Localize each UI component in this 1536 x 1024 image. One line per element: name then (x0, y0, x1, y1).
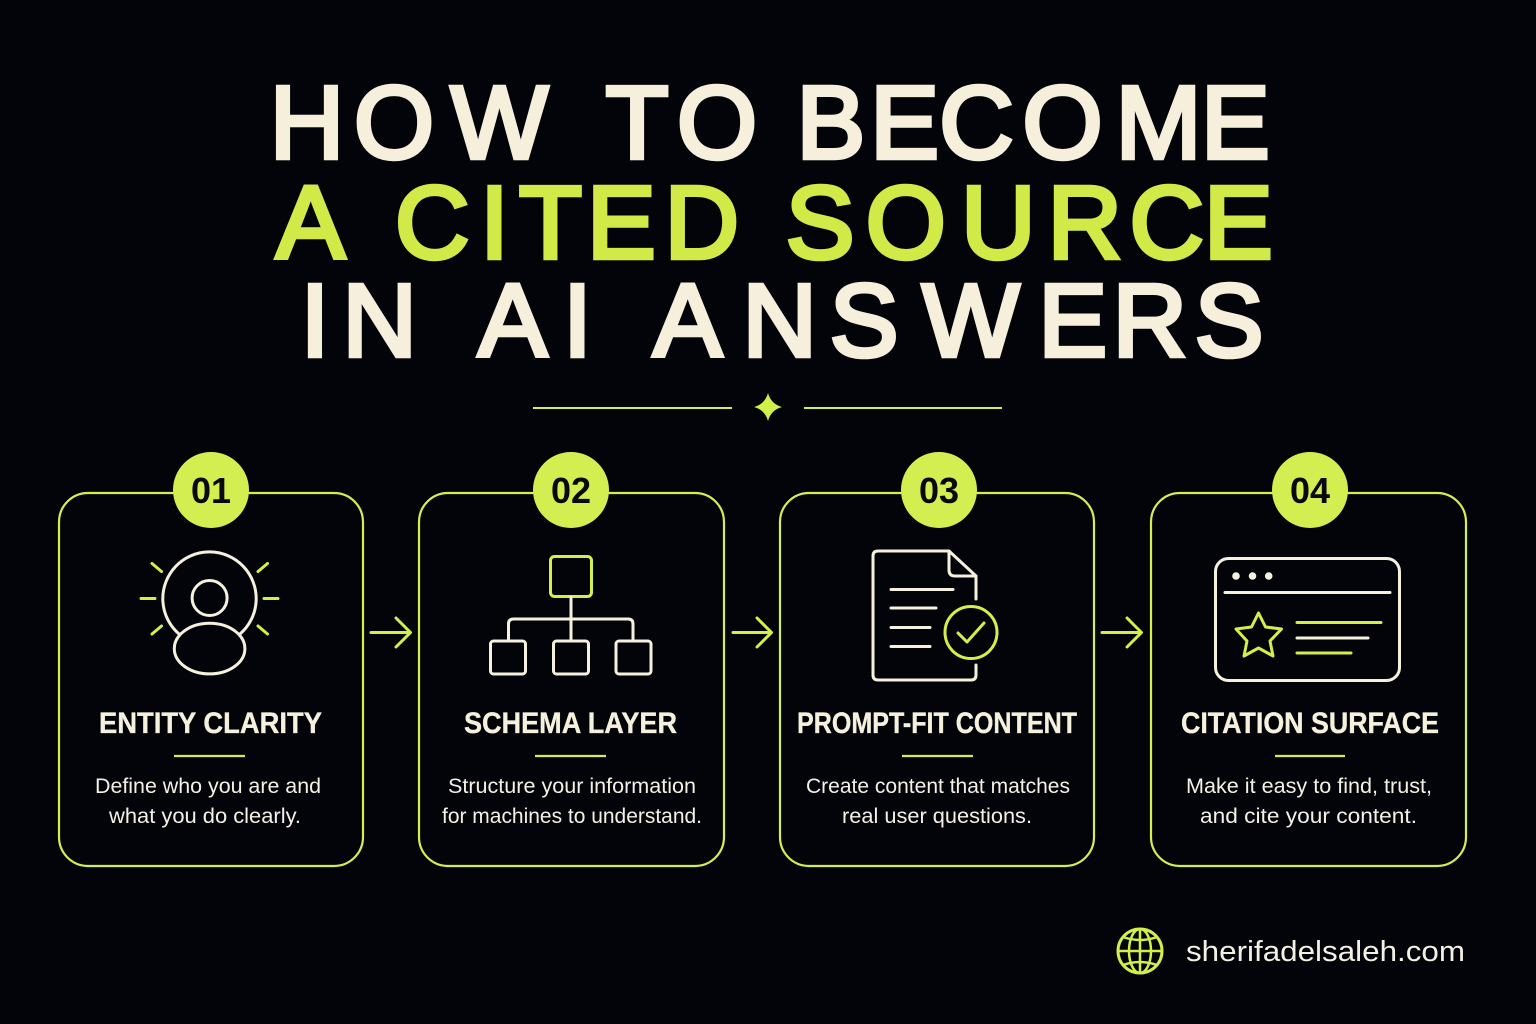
number badge 02: 02 (551, 470, 591, 511)
number badge 01: 01 (191, 470, 231, 511)
card border (59, 493, 363, 866)
number badge 03 (901, 452, 977, 528)
title line 3: IN AI ANSWERS (301, 263, 1263, 378)
step 2 heading: SCHEMA LAYER (464, 707, 677, 740)
icon: document with check (873, 551, 997, 680)
step 2 description: Structure your information (448, 775, 696, 798)
panel: step 4 citation surface (1151, 452, 1466, 866)
step 4 heading: CITATION SURFACE (1181, 707, 1439, 740)
card border (780, 493, 1094, 866)
step 1 description: what you do clearly. (108, 805, 301, 828)
step 4 description: and cite your content. (1200, 805, 1417, 828)
panel: step 3 prompt-fit content (780, 452, 1094, 866)
card border (1151, 493, 1466, 866)
step 3 heading: PROMPT-FIT CONTENT (797, 707, 1077, 740)
icon: browser window with star (1216, 558, 1400, 680)
arrow 3 to 4 (1102, 618, 1142, 647)
step 4 description (1186, 775, 1432, 828)
title (270, 65, 1273, 378)
step 3 description (806, 775, 1070, 828)
number badge 04: 04 (1290, 470, 1330, 511)
step 2 description (442, 775, 702, 828)
title divider with sparkle (533, 393, 1002, 421)
panel: step 1 entity clarity (59, 452, 363, 866)
number badge 02 (533, 452, 609, 528)
number badge 03: 03 (919, 470, 959, 511)
number badge 04 (1272, 452, 1348, 528)
arrow 1 to 2 (371, 618, 410, 647)
step 1 heading: ENTITY CLARITY (99, 707, 322, 740)
step 2 description: for machines to understand. (442, 805, 702, 828)
icon: person with rays (141, 552, 278, 674)
step 3 description: real user questions. (842, 805, 1032, 828)
arrow 2 to 3 (733, 618, 772, 647)
step 4 description: Make it easy to find, trust, (1186, 775, 1432, 798)
title line 1: HOW TO BECOME (270, 65, 1270, 180)
step 1 description: Define who you are and (95, 775, 321, 798)
step 1 description (95, 775, 321, 828)
panel: step 2 schema layer (419, 452, 724, 866)
website address: sherifadelsaleh.com (1186, 936, 1465, 968)
icon: globe (1118, 929, 1162, 973)
number badge 01 (173, 452, 249, 528)
step 3 description: Create content that matches (806, 775, 1070, 798)
website footer (1118, 929, 1465, 973)
title line 2: A CITED SOURCE (276, 165, 1273, 280)
card border (419, 493, 724, 866)
icon: hierarchy tree (490, 556, 651, 674)
